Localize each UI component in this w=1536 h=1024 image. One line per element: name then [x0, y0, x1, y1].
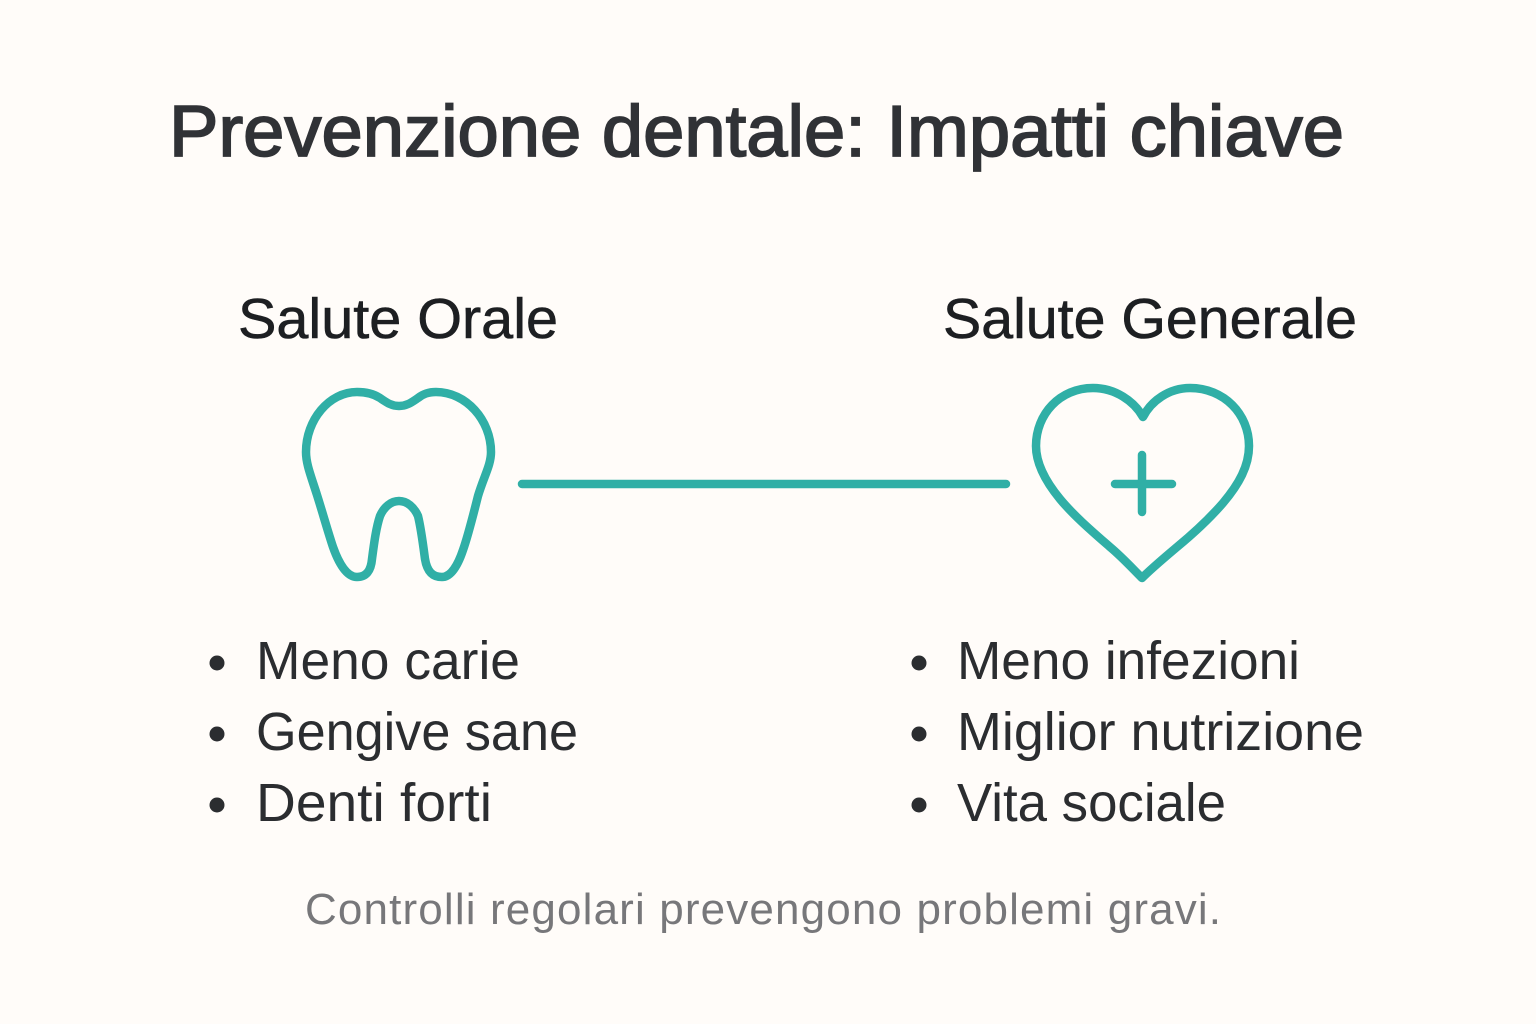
bullet and item: Miglior nutrizione: Miglior nutrizione: [957, 702, 1364, 762]
footer note: Controlli regolari prevengono problemi gravi.: [305, 885, 1221, 934]
bullet and item: Meno carie: Meno carie: [256, 631, 520, 691]
bullet and item: Meno infezioni: Meno infezioni: [957, 631, 1300, 691]
bullet and item: Vita sociale: Vita sociale: [957, 773, 1226, 833]
list: oral health benefits: [210, 631, 578, 833]
heading: Salute Generale: Salute Generale: [943, 287, 1357, 351]
icon: heart with plus: [1036, 388, 1249, 578]
bullet and item: Gengive sane: Gengive sane: [256, 702, 578, 762]
bullet and item: Denti forti: Denti forti: [256, 773, 492, 833]
list: general health benefits: [912, 631, 1364, 833]
connector line: [522, 480, 1006, 488]
heading: Salute Orale: Salute Orale: [238, 287, 558, 351]
title: Prevenzione dentale: Impatti chiave: [169, 92, 1344, 172]
icon: tooth: [306, 392, 491, 577]
